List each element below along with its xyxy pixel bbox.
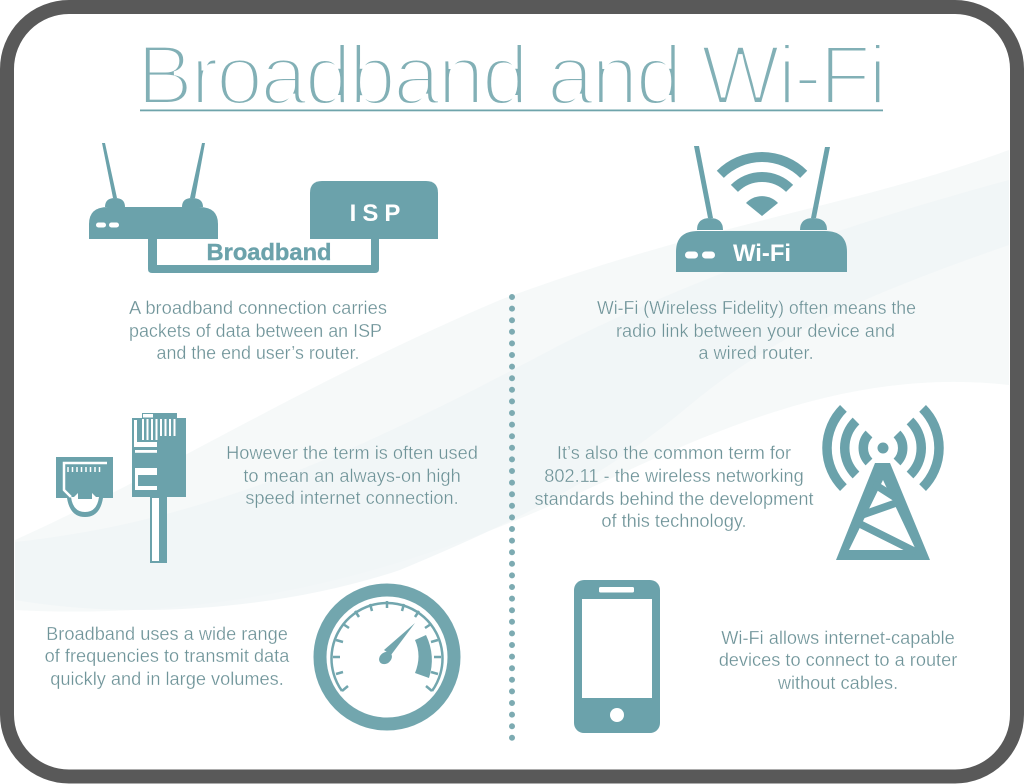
- icon: speedometer gauge: [320, 590, 454, 724]
- label: Broadband: Broadband: [206, 239, 332, 265]
- text: 802.11 meaning: standards behind the development: [534, 489, 814, 509]
- text: always-on meaning: [226, 443, 478, 508]
- icon: Wi-Fi router with signal: [676, 146, 847, 272]
- text: frequencies: Broadband uses a wide range: [46, 624, 288, 644]
- icon: radio tower: [827, 408, 939, 560]
- text: Wi-Fi definition: [597, 298, 916, 363]
- divider: dotted vertical line: [509, 297, 515, 738]
- label: ISP: ISP: [350, 200, 406, 227]
- text: Wi-Fi definition: radio link between your device and: [616, 321, 895, 341]
- text: frequencies: quickly and in large volumes.: [50, 669, 284, 689]
- text: always-on meaning: to mean an always-on high: [243, 466, 461, 486]
- icon: smartphone: [574, 580, 660, 733]
- background: pale flowing wave bands: [15, 150, 1009, 612]
- text: broadband definition: and the end user’s router.: [156, 343, 360, 363]
- label: Wi-Fi: Wi-Fi: [733, 240, 791, 267]
- text: 802.11 meaning: It’s also the common term for: [557, 443, 791, 463]
- text: broadband definition: packets of data between an ISP: [129, 321, 382, 341]
- title: Broadband and Wi-Fi: [137, 28, 887, 122]
- text: frequencies: [45, 624, 290, 689]
- text: devices without cables: devices to connect to a router: [719, 650, 957, 670]
- text: 802.11 meaning: 802.11 - the wireless networking: [544, 466, 804, 486]
- text: always-on meaning: speed internet connection.: [245, 488, 459, 508]
- text: devices without cables: [719, 628, 957, 693]
- text: broadband definition: A broadband connection carries: [129, 298, 387, 318]
- text: 802.11 meaning: [534, 443, 814, 531]
- text: broadband definition: [129, 298, 387, 363]
- text: 802.11 meaning: of this technology.: [601, 511, 747, 531]
- text: Wi-Fi definition: Wi-Fi (Wireless Fidelity) often means the: [597, 298, 916, 318]
- text: devices without cables: without cables.: [777, 673, 898, 693]
- text: devices without cables: Wi-Fi allows internet-capable: [721, 628, 955, 648]
- text: Wi-Fi definition: a wired router.: [698, 343, 814, 363]
- text: frequencies: of frequencies to transmit data: [45, 646, 290, 666]
- icon: broadband router connected to ISP: [89, 143, 438, 273]
- icon: ethernet jack and plug: [56, 413, 186, 563]
- text: always-on meaning: However the term is often used: [226, 443, 478, 463]
